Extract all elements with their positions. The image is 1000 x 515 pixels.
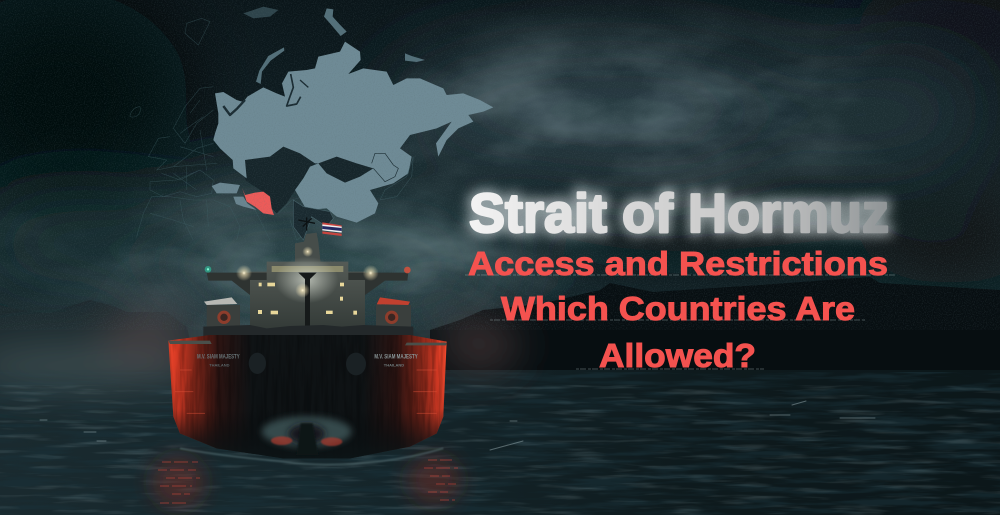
- icon: Thai flag: [322, 222, 342, 236]
- background: right headland: [430, 277, 1000, 372]
- map: Iran highlighted: [242, 188, 274, 215]
- ship: hull lower shading: [168, 335, 447, 458]
- ship: lifeboat left: [204, 297, 240, 327]
- ship: mast: [298, 273, 317, 330]
- sea reflections of the red hull: [152, 456, 460, 508]
- ship: deck lights: [205, 246, 411, 298]
- ship: hull: [168, 335, 447, 458]
- ship: right hull name: M.V. SIAM MAJESTY: [374, 354, 418, 361]
- subtitle line 3: Allowed?: [599, 337, 756, 374]
- background: night sky: [0, 0, 1000, 338]
- title glow: Strait of Hormuz: [468, 181, 890, 244]
- map: dark central Asia: [245, 147, 315, 213]
- title: Strait of Hormuz: [469, 182, 889, 244]
- map: Japan outline: [380, 157, 413, 200]
- fog around the ship: [0, 278, 520, 388]
- ship: bridge windows: [272, 266, 343, 272]
- map: Arctic islands: [256, 8, 425, 84]
- ship: deck rail: [168, 341, 447, 345]
- ship: floodlight glow: [275, 257, 338, 303]
- map: India outline: [293, 200, 333, 240]
- subtitle line waterlines: [465, 275, 895, 369]
- icon: radar antenna: [298, 217, 315, 231]
- ship: hull plating marks: [175, 370, 437, 413]
- ship: anchors: [249, 353, 366, 375]
- map: Europe and Africa faint borders: [130, 18, 335, 240]
- ship: left hull name: M.V. SIAM MAJESTY: [197, 354, 240, 361]
- ship: hull vertical streak texture: [168, 335, 446, 437]
- map of Eurasia: [130, 7, 493, 240]
- ship: bridge wings: [207, 273, 408, 295]
- wave foam: [40, 401, 875, 450]
- background: sea: [0, 370, 1000, 515]
- ship: superstructure: [250, 262, 365, 328]
- map: Arctic coast inlets: [223, 74, 308, 115]
- map: Manchuria outline: [372, 153, 398, 182]
- map: Mongolia: [318, 157, 373, 183]
- map: Russia and China land: [213, 42, 493, 223]
- ship: bow wave: [180, 448, 443, 465]
- subtitle line 1: Access and Restrictions: [468, 245, 888, 282]
- ship: [167, 217, 450, 465]
- ship: deck equipment: [203, 325, 413, 336]
- map: Turkey and Iraq: [212, 183, 257, 210]
- ship: windows: [258, 283, 357, 315]
- background: left mountains: [0, 300, 200, 385]
- grain over map and sky: [0, 0, 1000, 330]
- ship: bow bulb and foam: [262, 416, 352, 455]
- ship: funnel and upper block: [295, 233, 321, 263]
- ship: left hull registry: THAILAND: [209, 363, 230, 368]
- map: Severnaya Zemlya faint islands: [243, 7, 278, 18]
- ship: lifeboat right: [376, 297, 411, 327]
- ship: right hull registry: THAILAND: [384, 363, 404, 368]
- subtitle line 2: Which Countries Are: [501, 290, 855, 327]
